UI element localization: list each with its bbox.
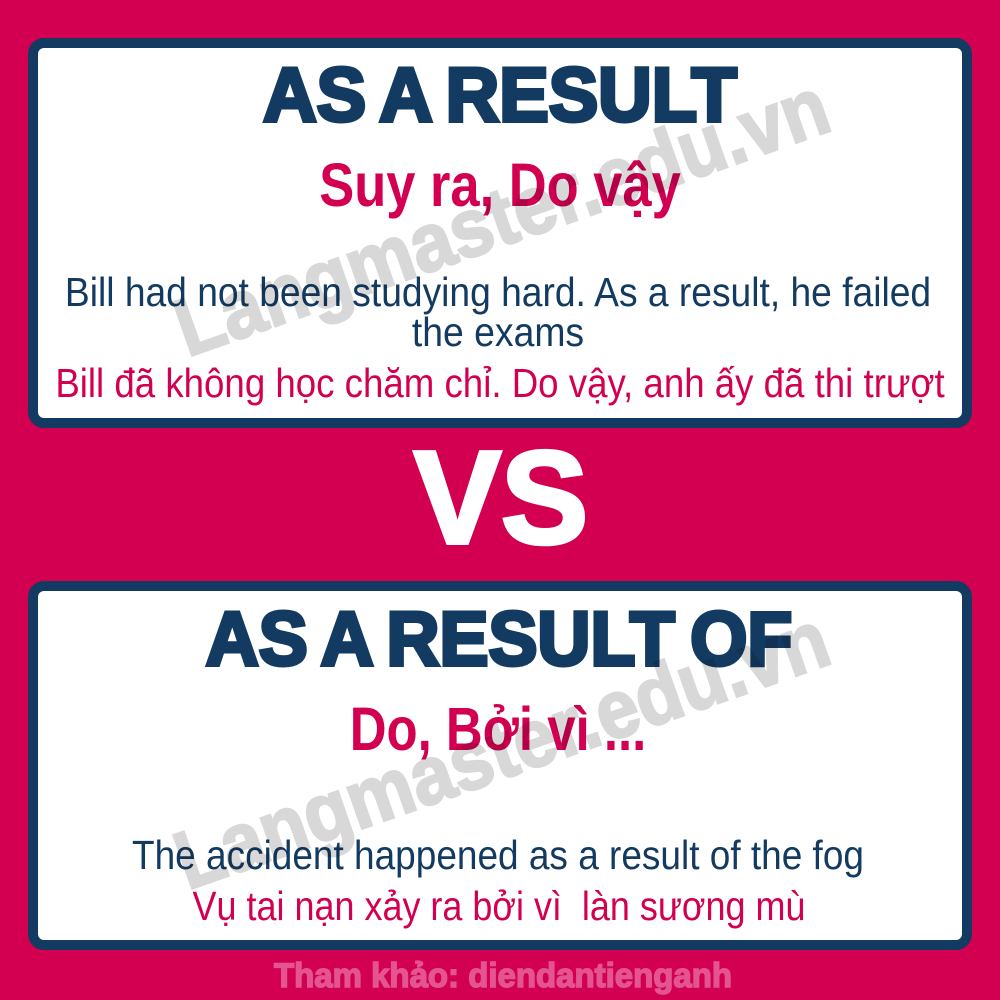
watermark bottom: Langmaster.edu.vn [163,593,841,907]
panel: as a result [28,38,972,428]
panel: as a result of [28,581,972,950]
translation text 1: Bill đã không học chăm chỉ. Do vậy, anh ấy đã thi trượt [55,360,944,406]
example text: english 1 line 1: Bill had not been studying hard. As a result, he failed [65,269,931,315]
title: as a result of: AS A RESULT OF [205,597,792,682]
example text: english 1 line 2: the exams [412,309,584,355]
subtitle: do, boi vi: Do, Bởi vì ... [349,695,646,763]
translation text 2: Vụ tai nạn xảy ra bởi vì làn sương mù [193,882,805,928]
subtitle: suy ra, do vay: Suy ra, Do vậy [319,151,680,219]
example text: english 2: The accident happened as a result of the fog [132,832,864,878]
footer source: Tham khảo: diendantienganh [273,956,732,994]
title: as a result: AS A RESULT [263,53,736,138]
watermark top: Langmaster.edu.vn [163,60,841,374]
vs heading: VS [414,424,588,571]
